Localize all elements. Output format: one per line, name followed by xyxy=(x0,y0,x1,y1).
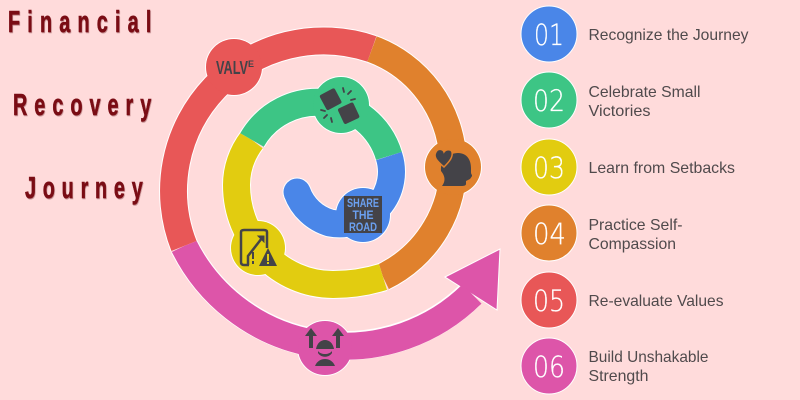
icon: share the road sign xyxy=(344,196,382,234)
step 01: Recognize the Journey xyxy=(588,27,748,44)
icon: head with heart xyxy=(435,149,472,186)
icon: fist bump xyxy=(319,88,360,125)
list: steps xyxy=(521,6,748,394)
step 06 xyxy=(521,338,709,394)
segment: yellow xyxy=(230,140,383,284)
title: Journey xyxy=(25,169,143,205)
step 04: Compassion xyxy=(588,236,676,253)
step 06: 06 xyxy=(533,350,565,384)
step 03: Learn from Setbacks xyxy=(588,160,735,177)
icon: road fork with warning xyxy=(241,230,277,266)
icon: share the road sign: ROAD xyxy=(349,220,377,234)
step 04: Practice Self- xyxy=(588,217,682,234)
title: Recovery xyxy=(13,86,152,122)
icon: share the road sign: SHARE xyxy=(347,196,379,210)
step 02: Victories xyxy=(588,103,650,120)
step 03: 03 xyxy=(533,151,565,185)
step 05: 05 xyxy=(533,284,565,318)
step 03 xyxy=(521,139,735,195)
segment: pink arrow xyxy=(184,246,500,376)
step 04: 04 xyxy=(533,217,566,251)
title: Financial xyxy=(8,3,151,39)
step 06: Build Unshakable xyxy=(588,349,709,366)
segment: green xyxy=(252,76,389,156)
step 02 xyxy=(521,72,700,128)
step 02: Celebrate Small xyxy=(588,84,700,101)
title xyxy=(8,3,152,205)
step 06: Strength xyxy=(588,368,648,385)
icon: share the road sign: THE xyxy=(352,208,374,222)
step 04 xyxy=(521,205,682,261)
icon: valve word: VALV xyxy=(216,58,248,78)
segment: orange xyxy=(372,49,482,277)
spiral diagram xyxy=(174,38,500,376)
step 02: 02 xyxy=(533,84,565,118)
step 05: Re-evaluate Values xyxy=(588,293,724,310)
icon: rising worker xyxy=(305,328,344,366)
step 05 xyxy=(521,272,724,328)
step 01 xyxy=(521,6,748,62)
step 01: 01 xyxy=(534,18,564,52)
icon: valve word: E xyxy=(248,59,254,69)
segment: blue xyxy=(282,156,391,243)
segment: red xyxy=(174,38,372,246)
